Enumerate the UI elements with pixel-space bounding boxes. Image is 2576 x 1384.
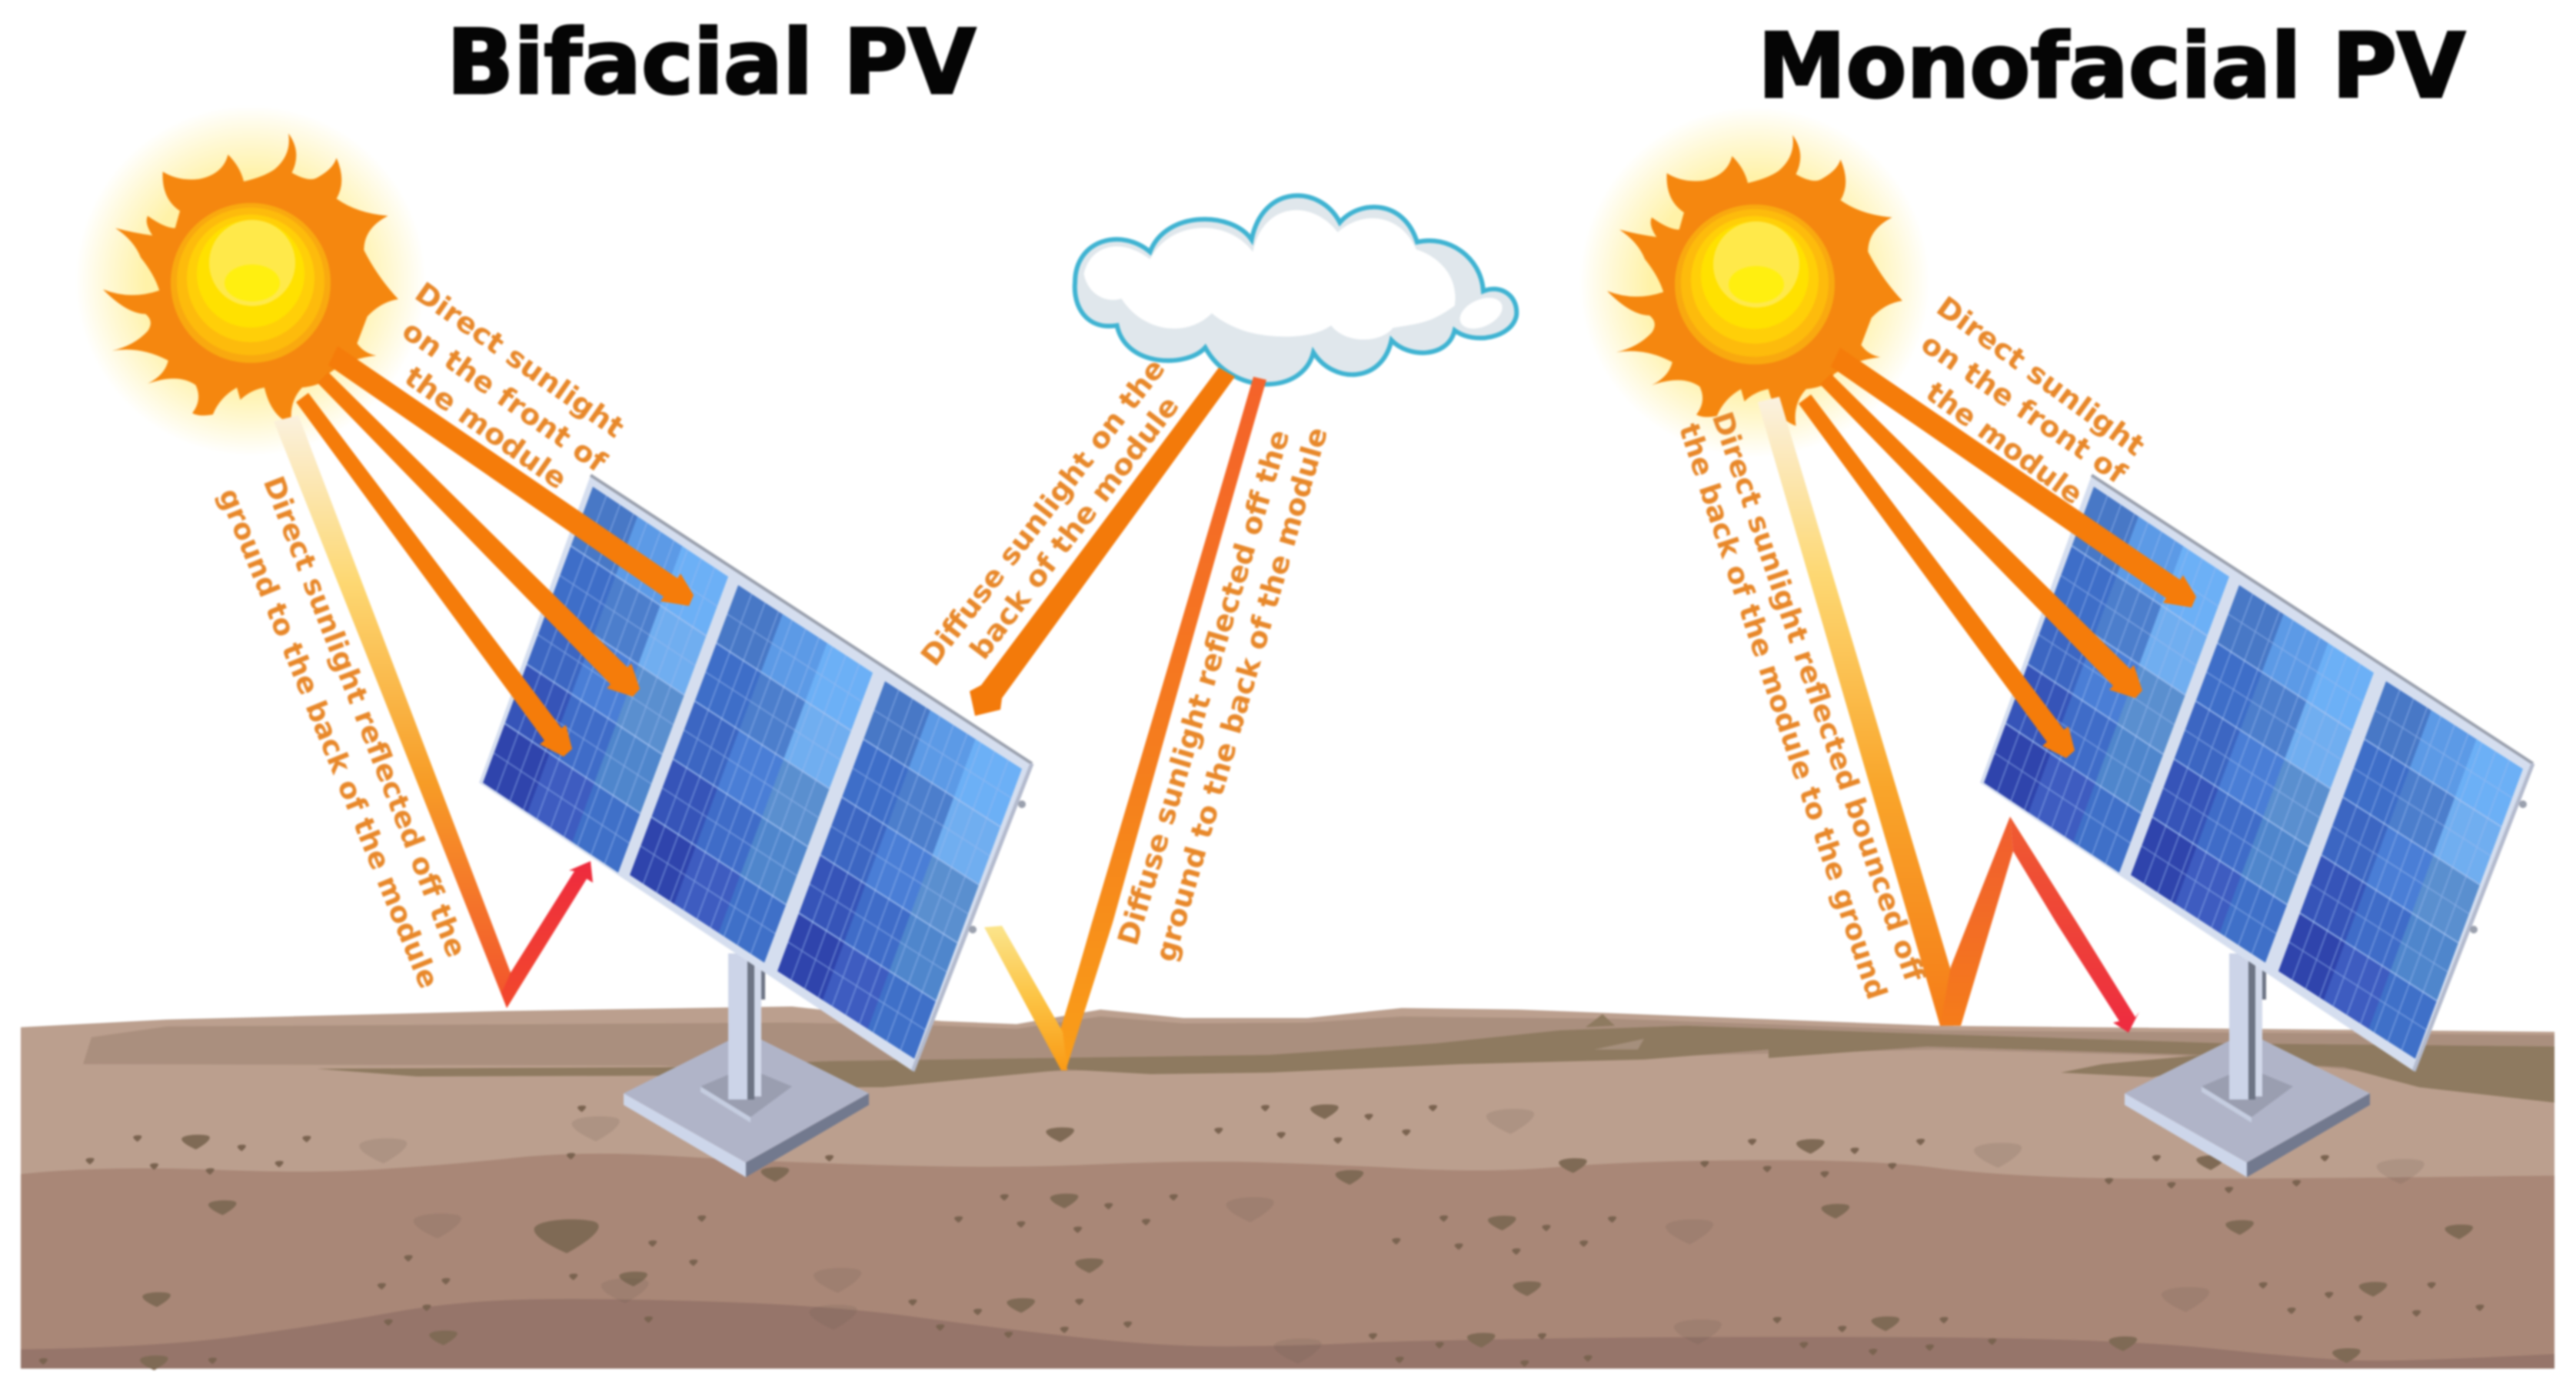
title: Monofacial PV: Monofacial PV (1758, 15, 2465, 118)
label: direct sunlight on the front, monofacial: Direct sunlight (1930, 290, 2151, 463)
arrow: diffuse sunlight reflected off ground to back (984, 377, 1266, 1070)
label: direct sunlight reflected bounced off, monofacial: the back of the module to the ground (1672, 419, 1893, 1003)
ground: soil layers (21, 1006, 2554, 1369)
label: diffuse sunlight reflected off the ground: Diffuse sunlight reflected off the (1111, 426, 1296, 949)
title: Bifacial PV: Bifacial PV (447, 11, 976, 115)
label: diffuse sunlight reflected off the ground: ground to the back of the module (1149, 424, 1334, 965)
label: diffuse sunlight on the back: back of the module (964, 390, 1186, 666)
label: direct sunlight on the front, monofacial (1915, 290, 2151, 511)
solar panel array: monofacial (1980, 475, 2533, 1177)
ground stones right (1273, 1104, 2484, 1367)
label: direct sunlight on the front, bifacial: Direct sunlight (409, 276, 631, 444)
label: direct sunlight on the front, bifacial (396, 276, 631, 496)
label: direct sunlight reflected off the ground, bifacial: Direct sunlight reflected off the (257, 471, 473, 962)
arrow: direct sunlight bounced off module to ground, monofacial (1758, 397, 2139, 1033)
arrow: direct sunlight reflected off ground to back, bifacial (274, 415, 593, 1008)
ground stones left (39, 1105, 1286, 1370)
sun: left (75, 105, 426, 456)
label: direct sunlight reflected off the ground, bifacial: ground to the back of the module (212, 484, 445, 993)
sun: right (1579, 107, 1930, 457)
label: direct sunlight on the front, bifacial: the module (398, 360, 573, 496)
label: direct sunlight reflected bounced off, monofacial: Direct sunlight reflected bounced off (1706, 408, 1932, 986)
arrows: direct sunlight on front, bifacial (296, 346, 694, 757)
label: direct sunlight on the front, monofacial: on the front of (1915, 327, 2133, 491)
label: direct sunlight on the front, bifacial: on the front of (396, 314, 613, 479)
label: direct sunlight on the front, monofacial: the module (1920, 375, 2089, 511)
cloud (1075, 195, 1516, 384)
label: diffuse sunlight on the back: Diffuse sunlight on the (914, 353, 1172, 672)
arrows: direct sunlight on front, monofacial (1799, 348, 2196, 758)
solar panel array: bifacial (479, 475, 1032, 1177)
arrow: diffuse sunlight on back of module (970, 368, 1235, 716)
